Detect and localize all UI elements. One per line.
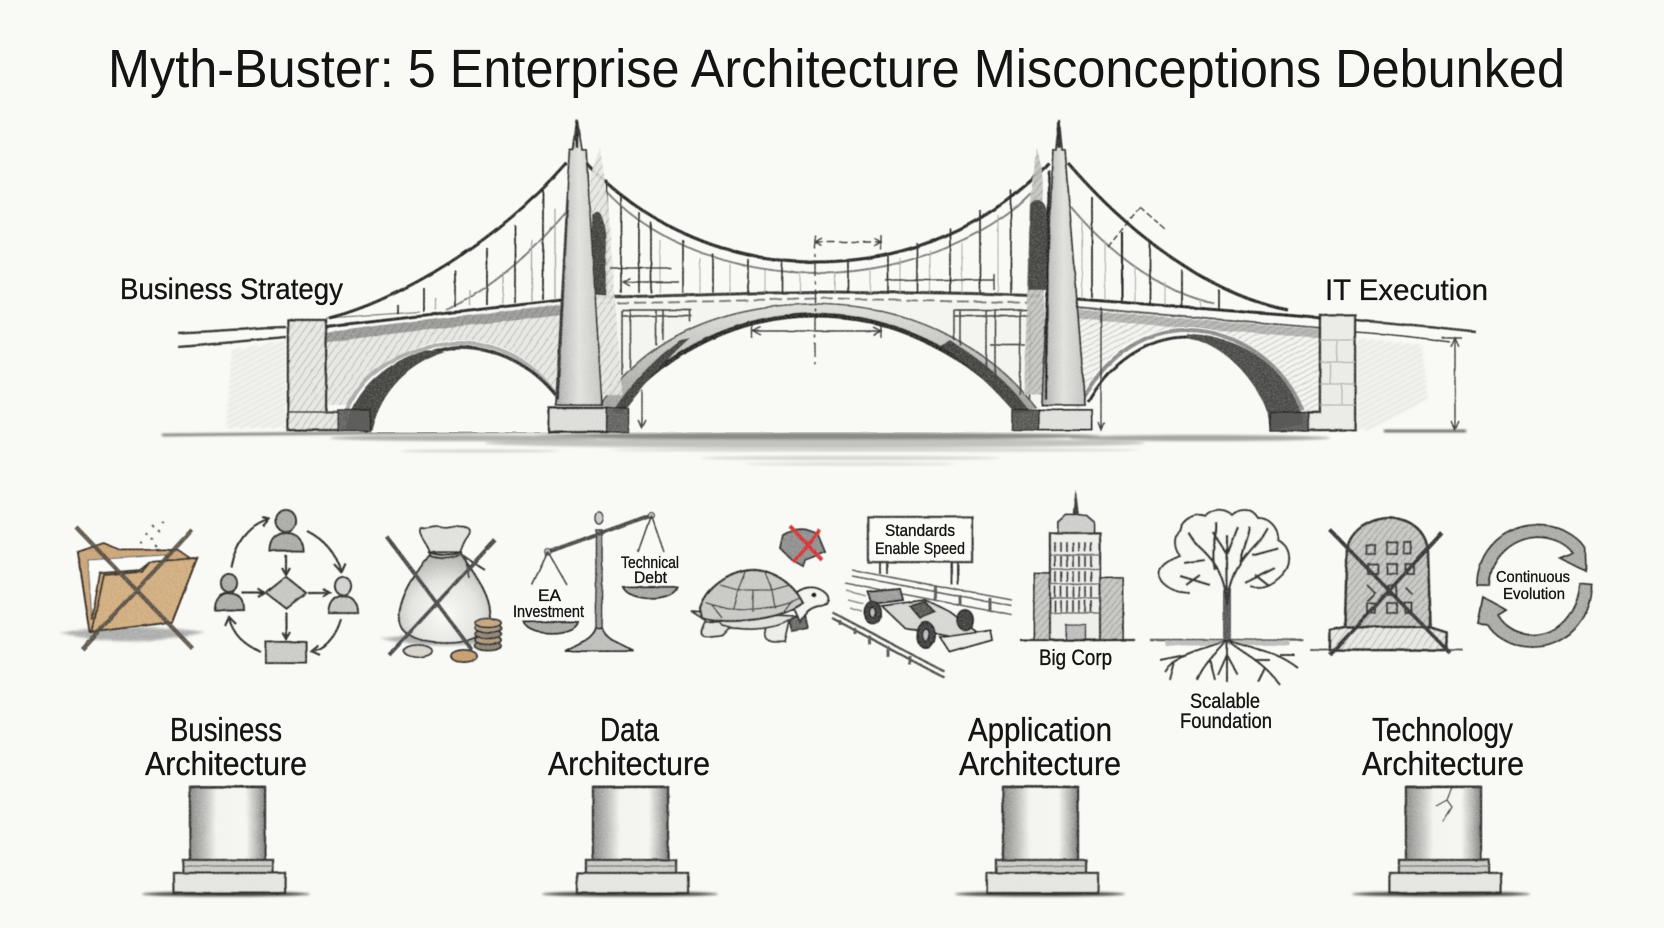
icon: crossed out stone tablet [1310, 518, 1463, 655]
pillar: technology architecture: Architecture [1362, 745, 1524, 782]
right abutment [1270, 315, 1355, 431]
pillar: data architecture: Data [600, 711, 660, 748]
icon: people and process cycle [215, 510, 358, 663]
title: Myth-Buster: 5 Enterprise Architecture Misconceptions Debunked [108, 39, 1565, 99]
pillar: application architecture [955, 711, 1125, 896]
spandrel walls [326, 300, 1322, 420]
suspension cables and hangers [329, 163, 1288, 318]
left arch opening [345, 340, 562, 432]
scale labels: Debt [634, 568, 667, 587]
bridge illustration [162, 120, 1476, 466]
pillar: technology architecture: Technology [1372, 711, 1513, 748]
icon: crossed out dusty folder [60, 522, 205, 649]
pillar: data architecture: Architecture [548, 745, 710, 782]
window lattices [622, 310, 1030, 400]
left arch stones [345, 343, 558, 432]
dimension annotations [610, 207, 1462, 430]
icon: highway with race car [832, 570, 1012, 678]
right tower [1012, 120, 1092, 430]
deck [326, 292, 1322, 328]
pillar: application architecture: Application [968, 711, 1112, 748]
label: business strategy: Business Strategy [120, 273, 343, 306]
icon: tree with deep roots [1150, 510, 1303, 685]
icon: continuous evolution cycle [1477, 525, 1592, 647]
main arch opening [598, 304, 1036, 432]
pillar: business architecture: Architecture [145, 745, 307, 782]
icon: continuous evolution cycle: Evolution [1503, 586, 1565, 603]
sign text: Standards [885, 521, 955, 540]
road sign: standards enable speed: Enable Speed [875, 539, 965, 558]
road sign: standards enable speed [868, 517, 972, 585]
label: scalable foundation: Scalable [1190, 690, 1260, 713]
label: it execution: IT Execution [1325, 274, 1488, 307]
scale labels [513, 553, 679, 621]
icon: balance scale [513, 512, 679, 651]
scale labels: Investment [513, 602, 584, 621]
pillar: technology architecture [1352, 711, 1530, 896]
approach roads [178, 320, 1476, 347]
cycle text: Continuous [1496, 569, 1570, 586]
water and ground [162, 431, 1466, 466]
icon: crossed out money bag and coins [380, 527, 501, 662]
label: scalable foundation: Foundation [1180, 710, 1272, 733]
label: big corp: Big Corp [1039, 645, 1112, 670]
icon: big corp building [1020, 490, 1135, 640]
right arch stones [1084, 330, 1304, 430]
left tower [549, 120, 628, 432]
icon: crossed out document with red x [780, 526, 825, 566]
pillar: business architecture [142, 711, 310, 896]
scale labels: EA [538, 586, 562, 605]
pillar: application architecture: Architecture [959, 745, 1121, 782]
main central arch [600, 304, 1036, 414]
pillar: data architecture [542, 711, 718, 896]
icon: turtle [691, 570, 828, 641]
label: scalable foundation [1180, 690, 1272, 733]
pillar: business architecture: Business [170, 711, 282, 748]
scale labels: Technical [621, 553, 679, 572]
left abutment [288, 320, 370, 431]
right arch opening [1081, 327, 1304, 432]
